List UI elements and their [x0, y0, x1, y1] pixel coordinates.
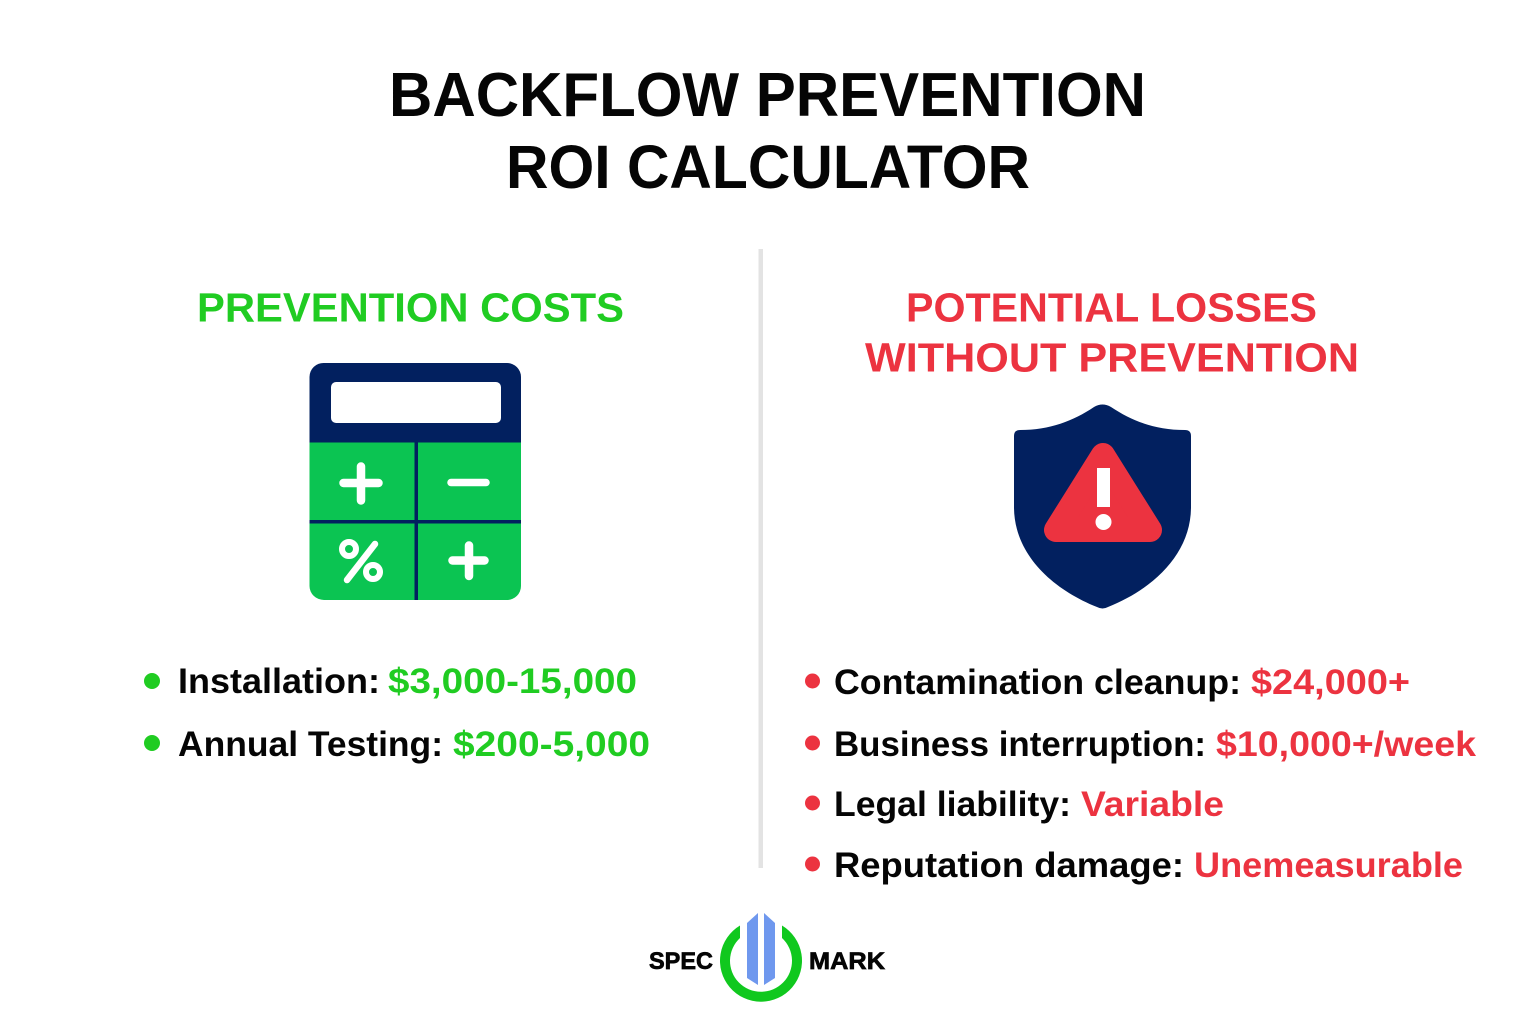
icon: warning shield — [1014, 404, 1191, 608]
logo: spec mark — [649, 913, 886, 1002]
title: BACKFLOW PREVENTION — [389, 61, 1146, 130]
logo: spec mark: MARK — [809, 948, 886, 975]
title: ROI CALCULATOR — [506, 133, 1030, 201]
heading: potential losses: WITHOUT PREVENTION — [865, 334, 1359, 380]
list: prevention costs — [144, 662, 650, 764]
list: potential losses: $24,000+ — [1251, 663, 1410, 702]
heading: potential losses: POTENTIAL LOSSES — [906, 284, 1317, 330]
heading: prevention costs: PREVENTION COSTS — [197, 284, 624, 330]
list: potential losses: Contamination cleanup: — [834, 663, 1241, 702]
panel: potential losses — [805, 284, 1477, 885]
title — [389, 61, 1146, 201]
list: potential losses: Variable — [1081, 785, 1224, 824]
list: prevention costs: Annual Testing: — [178, 725, 443, 764]
list: potential losses: Reputation damage: — [834, 846, 1184, 885]
logo: spec mark: SPEC — [649, 948, 713, 975]
list: prevention costs: $200-5,000 — [453, 725, 650, 764]
list: prevention costs: $3,000-15,000 — [388, 662, 637, 701]
list: prevention costs: Installation: — [178, 662, 380, 701]
list: potential losses: Legal liability: — [834, 785, 1071, 824]
heading: potential losses — [865, 284, 1359, 380]
list: potential losses: Business interruption: — [834, 725, 1206, 764]
icon: calculator — [310, 363, 521, 600]
panel: prevention costs — [144, 284, 650, 764]
list: potential losses: Unemeasurable — [1194, 846, 1463, 885]
list: potential losses: $10,000+/week — [1216, 725, 1477, 764]
list: potential losses — [805, 663, 1477, 885]
